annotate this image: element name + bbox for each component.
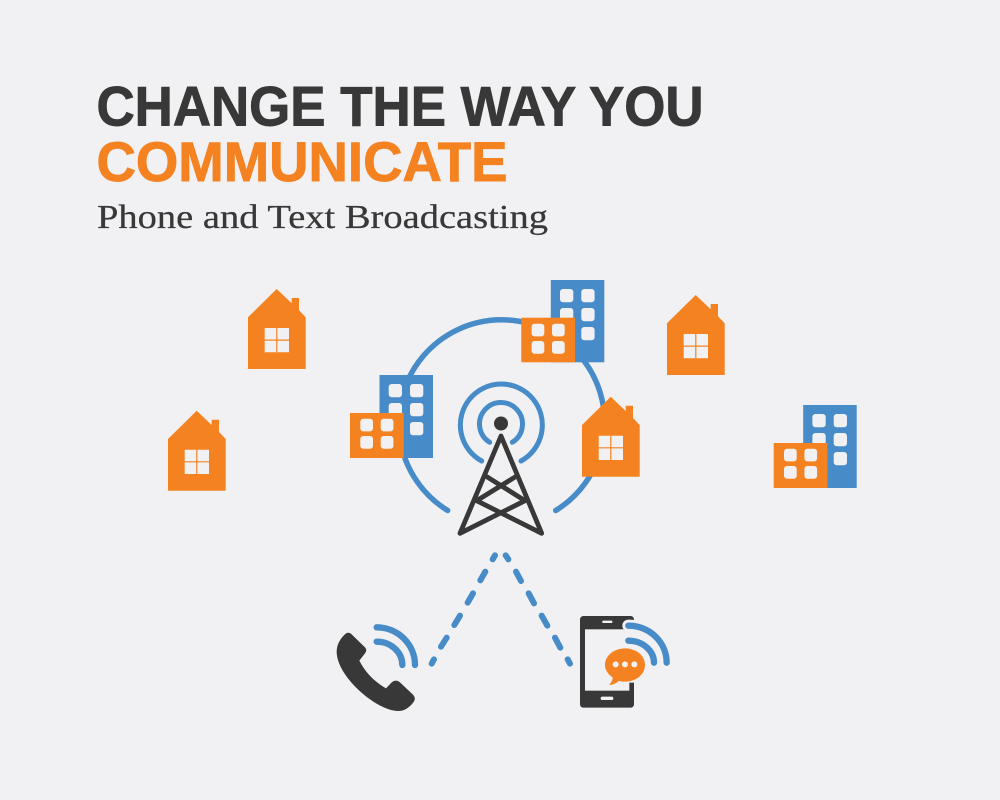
icon: buildings far right (774, 405, 857, 488)
icon: radio tower with signal arcs (460, 384, 542, 533)
icon: house on ring (582, 397, 640, 477)
subtitle: Phone and Text Broadcasting (97, 199, 548, 236)
icon: house top right (667, 295, 725, 375)
icon: smartphone with chat bubble (580, 616, 667, 708)
dashed link to phone (432, 555, 495, 664)
tower beacon (494, 416, 508, 430)
icon: buildings on ring top (521, 280, 604, 362)
title block (96, 74, 704, 236)
signal ring around tower (399, 320, 605, 510)
tower frame (460, 436, 542, 533)
title line 2: COMMUNICATE (96, 130, 508, 193)
icon: telephone handset with signal (337, 627, 415, 711)
icon: house top left (248, 289, 306, 369)
dashed link to smartphone (506, 555, 570, 664)
tower signal arcs (460, 384, 542, 461)
title line 1: CHANGE THE WAY YOU (96, 74, 704, 138)
icon: house far left (168, 411, 226, 491)
chat bubble (605, 648, 645, 685)
icon: buildings on ring left (350, 375, 433, 458)
